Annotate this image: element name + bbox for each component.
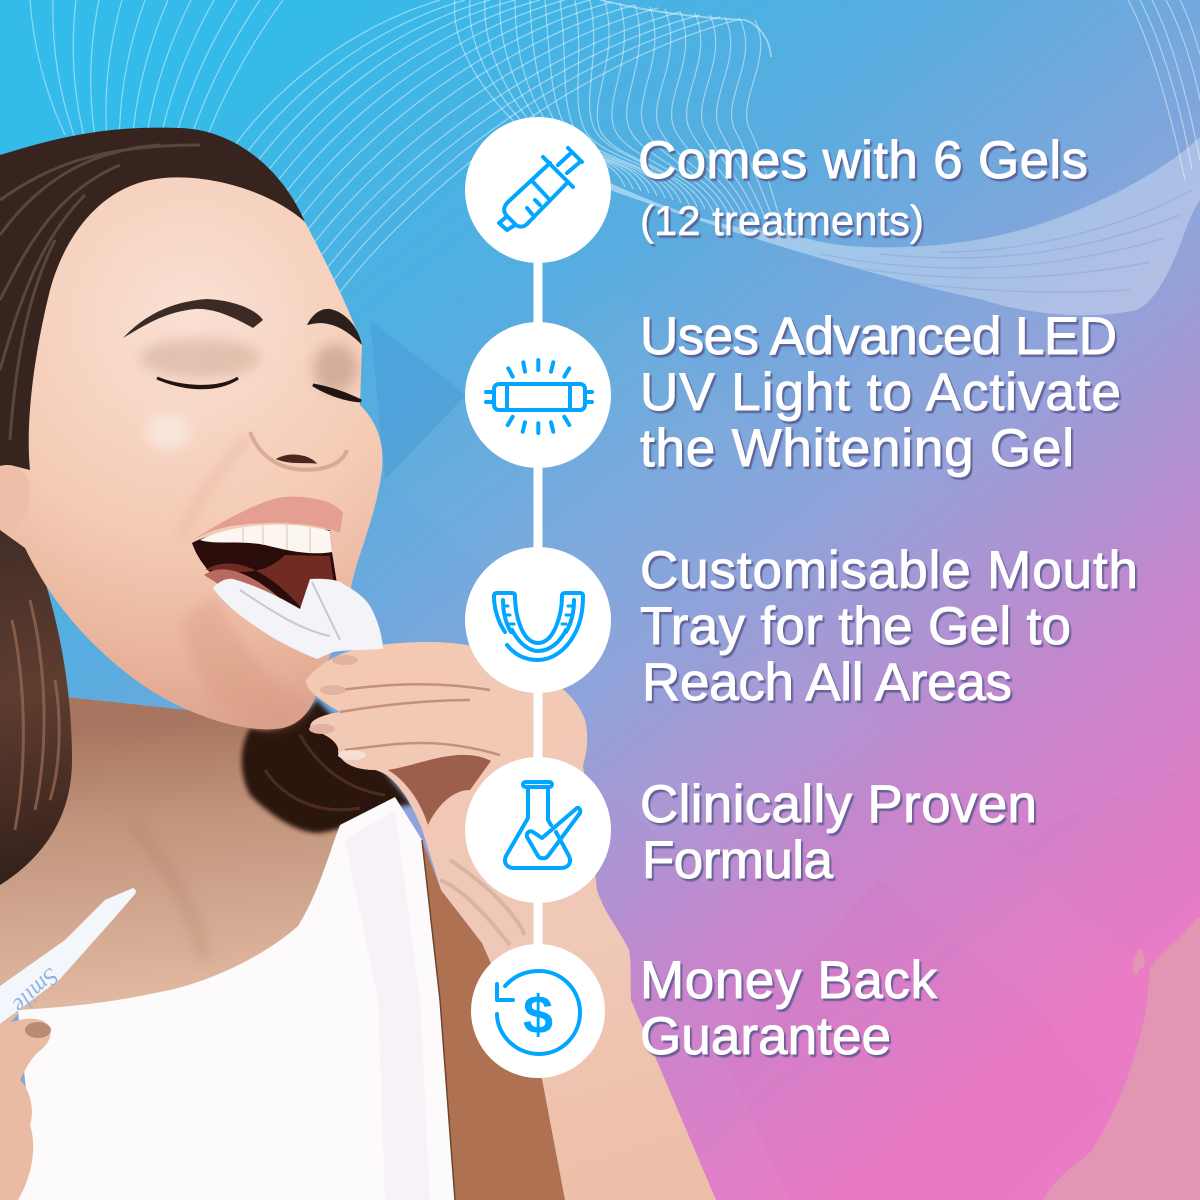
text: clinically proven: Clinically Proven xyxy=(640,775,1037,834)
text: advanced led: Uses Advanced LED xyxy=(640,307,1117,366)
ear xyxy=(0,465,30,528)
text: clinically proven xyxy=(640,775,1037,890)
smile line xyxy=(180,435,250,540)
text: advanced led: UV Light to Activate xyxy=(640,363,1121,422)
neck and chest xyxy=(0,690,360,1035)
icon circle xyxy=(465,322,611,468)
upper lip xyxy=(192,497,343,541)
text: customisable tray: Customisable Mouth xyxy=(640,541,1138,600)
text: customisable tray xyxy=(640,541,1138,712)
mouth tray xyxy=(213,579,383,659)
step 2: led xyxy=(465,307,1121,478)
icon: money back: $ xyxy=(523,985,553,1045)
step 4: proven formula xyxy=(465,757,1037,903)
finger creases xyxy=(340,684,500,755)
icon circle xyxy=(465,757,611,903)
upper arm xyxy=(420,835,575,1200)
icon: syringe xyxy=(499,148,582,230)
mesh line pattern top left xyxy=(30,0,785,292)
gel pen: Smile xyxy=(7,963,64,1018)
timeline connector xyxy=(534,190,542,1011)
text: customisable tray: Tray for the Gel to xyxy=(640,597,1071,656)
icon: tray xyxy=(494,593,583,660)
text: comes with 6 gels: Comes with 6 Gels xyxy=(638,131,1088,190)
text: customisable tray: Reach All Areas xyxy=(642,653,1012,712)
fingers holding pen xyxy=(0,1019,50,1200)
text: comes with 6 gels xyxy=(638,131,1088,244)
text: comes with 6 gels: (12 treatments) xyxy=(640,197,924,244)
text: money back guarantee: Money Back xyxy=(640,951,938,1010)
step 5: money back xyxy=(471,944,938,1078)
wave ribbon xyxy=(610,137,1200,315)
hair top xyxy=(0,128,305,520)
text: advanced led xyxy=(640,307,1121,478)
open mouth xyxy=(192,528,338,625)
text: money back guarantee: Guarantee xyxy=(640,1007,891,1066)
hair back xyxy=(242,700,412,833)
icon: money back xyxy=(497,971,580,1054)
gel pen xyxy=(0,888,136,1024)
icon circle xyxy=(471,944,605,1078)
icon: flask with check xyxy=(505,782,580,868)
upper teeth xyxy=(200,525,332,553)
text: advanced led: the Whitening Gel xyxy=(640,419,1074,478)
dotted texture corner xyxy=(1043,918,1200,1200)
white dress xyxy=(5,797,455,1200)
icon circle xyxy=(465,547,611,693)
step 1: gels xyxy=(465,117,1088,263)
fingernails xyxy=(309,655,366,760)
wrist texture xyxy=(440,860,525,945)
mesh lines top right xyxy=(1128,0,1200,180)
text: money back guarantee xyxy=(640,951,938,1066)
forearm and hand xyxy=(306,642,716,1200)
text: clinically proven: Formula xyxy=(642,831,834,890)
tongue xyxy=(205,555,334,635)
step 3: mouth tray xyxy=(465,541,1138,712)
hair lower left xyxy=(0,480,72,885)
woman with mouth tray xyxy=(0,128,716,1200)
nose xyxy=(250,432,347,470)
palm shadow xyxy=(388,755,491,825)
icon: led tube xyxy=(486,360,592,433)
thumbnail xyxy=(25,1022,51,1038)
closed eyes xyxy=(157,378,238,388)
jaw shading xyxy=(180,595,312,729)
icon circle xyxy=(465,117,611,263)
face xyxy=(0,177,383,729)
eyebrows xyxy=(123,299,263,338)
eye shadows xyxy=(140,338,260,378)
cheek highlight xyxy=(146,414,190,450)
